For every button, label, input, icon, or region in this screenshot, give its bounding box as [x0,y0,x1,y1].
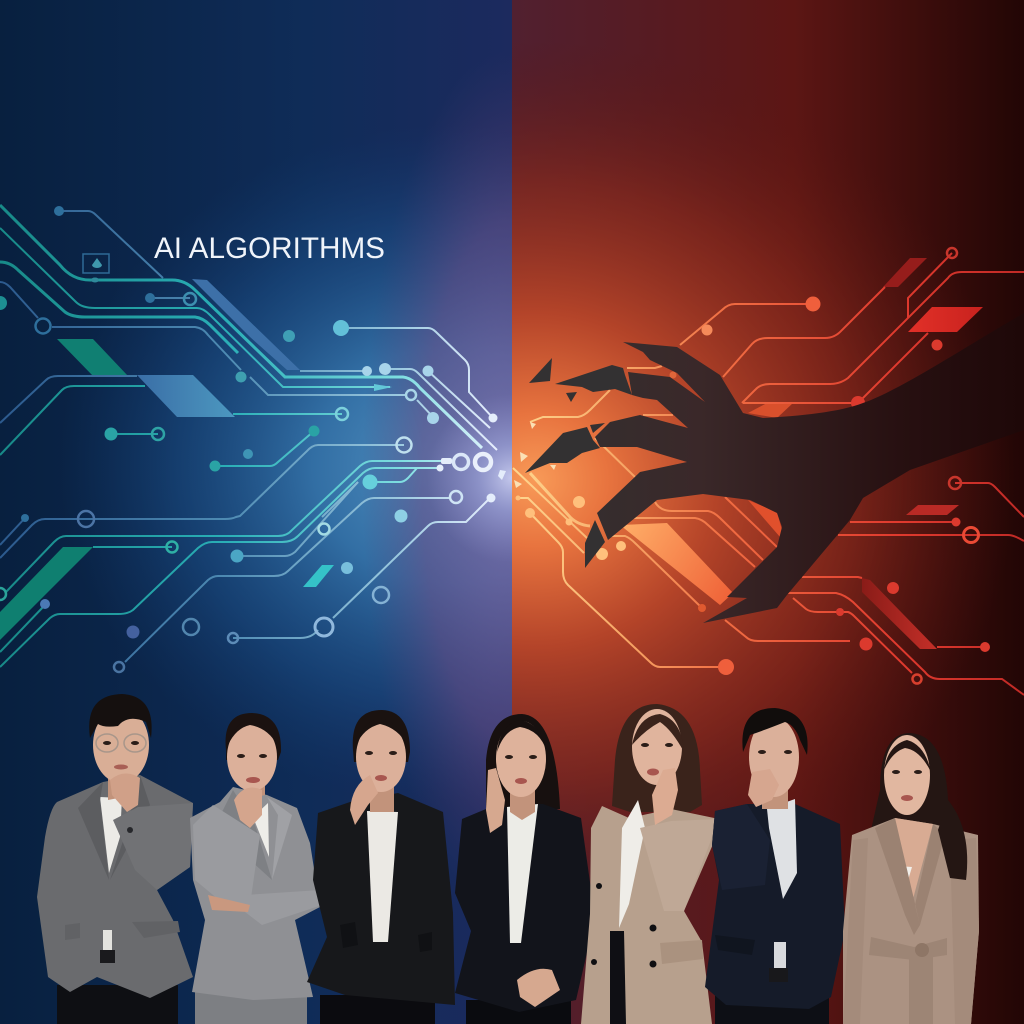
red circuit nodes [516,248,990,684]
arm and palm [595,313,1024,623]
title text: AI ALGORITHMS [154,232,385,265]
person 7: woman with taupe coat [843,733,979,1024]
red accent shapes [620,258,983,649]
sparks around the hand [514,422,556,488]
blue circuit nodes [0,206,506,672]
icon: framed drop [83,254,109,282]
shadow hand reaching from the right [525,313,1024,623]
person 6: man with dark suit [705,708,845,1024]
claw: small fragment [566,392,577,402]
background: right red half [512,0,1024,1024]
person 1: man with glasses and grey blazer [37,694,193,1024]
background: left blue half [0,0,512,1024]
claw: fragment triangle [529,358,552,383]
claw: lower [585,520,605,568]
person 3: woman with black blazer [307,710,455,1024]
red circuit network [513,253,1024,695]
blue accent shapes [0,279,334,640]
blue circuit network [0,205,497,667]
person 2: woman with grey blazer, arms crossed [190,713,322,1024]
person 4: woman with black blazer, hand to cheek [455,714,595,1024]
claw: upper [555,365,632,395]
person 5: woman with beige blazer [581,704,719,1024]
claw: middle sliver [590,423,605,433]
claw: middle [525,427,600,473]
